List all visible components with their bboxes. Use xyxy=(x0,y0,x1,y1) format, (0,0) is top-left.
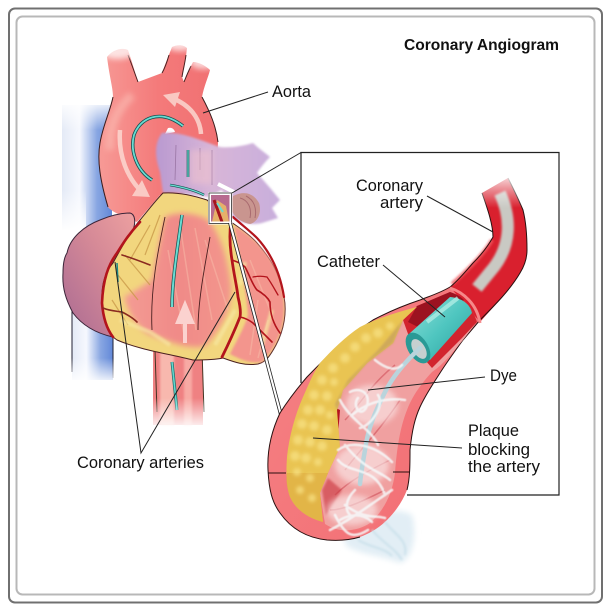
catheter xyxy=(401,297,472,368)
label: Catheter: Catheter xyxy=(317,253,380,271)
label: Plaque blocking the artery: blocking xyxy=(468,441,530,459)
heart dividing lines xyxy=(152,217,210,330)
label: Catheter xyxy=(317,253,445,317)
teal aortic arch line xyxy=(133,116,183,180)
label: Coronary arteries xyxy=(77,262,235,472)
descending aorta xyxy=(146,345,211,430)
aorta xyxy=(99,37,218,222)
teal heart line xyxy=(172,215,182,307)
lumen xyxy=(320,292,477,530)
fade at artery top xyxy=(472,170,534,208)
inset panel frame xyxy=(301,152,559,495)
dye cloud leaving artery xyxy=(345,511,414,563)
upper artery dark red xyxy=(450,178,527,322)
title: Coronary Angiogram xyxy=(404,37,559,54)
dye stream xyxy=(360,348,420,484)
grey artery lumen xyxy=(477,193,508,288)
plaque fat texture xyxy=(112,215,160,325)
muscle: central xyxy=(124,213,231,347)
superior vena cava xyxy=(56,100,121,232)
dye swirls outside artery xyxy=(358,522,405,560)
label: Coronary artery xyxy=(356,177,493,232)
arrow: aorta ascending xyxy=(163,92,201,134)
fade on aortic branch tops xyxy=(100,41,136,59)
muscle fibres xyxy=(168,225,274,358)
inset locator box xyxy=(209,193,232,224)
inferior vena cava xyxy=(66,300,120,384)
label: Coronary artery: Coronary xyxy=(356,177,424,195)
illustration: artery cross-section xyxy=(268,170,534,563)
dye swirls xyxy=(330,360,405,535)
section lines xyxy=(268,472,410,473)
artery outline xyxy=(268,178,527,540)
white dye wash xyxy=(327,385,398,525)
illustration: heart xyxy=(56,37,285,430)
coronary arteries xyxy=(102,217,284,357)
label: Aorta: Aorta xyxy=(272,83,312,101)
label: Dye xyxy=(368,367,517,390)
label: Coronary artery: artery xyxy=(380,194,424,212)
label: Aorta xyxy=(203,83,312,113)
label: Coronary arteries: Coronary arteries xyxy=(77,454,204,472)
left atrial appendage xyxy=(218,184,260,224)
pulmonary artery xyxy=(156,133,280,224)
label: Plaque blocking the artery xyxy=(313,422,541,476)
label: Plaque blocking the artery: Plaque xyxy=(468,422,519,440)
arrow: aorta descending xyxy=(120,130,150,197)
lumen folds xyxy=(330,365,400,510)
catheter opening rim xyxy=(450,288,480,323)
lumen red above and below catheter xyxy=(403,292,477,368)
plaque nodules xyxy=(290,322,394,502)
right atrium xyxy=(63,213,135,337)
zoom leader top xyxy=(232,152,301,193)
artery wall outer xyxy=(268,178,527,540)
label: Plaque blocking the artery: the artery xyxy=(468,458,541,476)
muscle: right xyxy=(230,226,284,362)
zoom leader bottom xyxy=(228,223,282,415)
heart ventricles xyxy=(102,193,285,365)
label: Dye: Dye xyxy=(490,367,517,385)
arrow: heart upward xyxy=(178,305,192,343)
plaque xyxy=(286,307,417,522)
